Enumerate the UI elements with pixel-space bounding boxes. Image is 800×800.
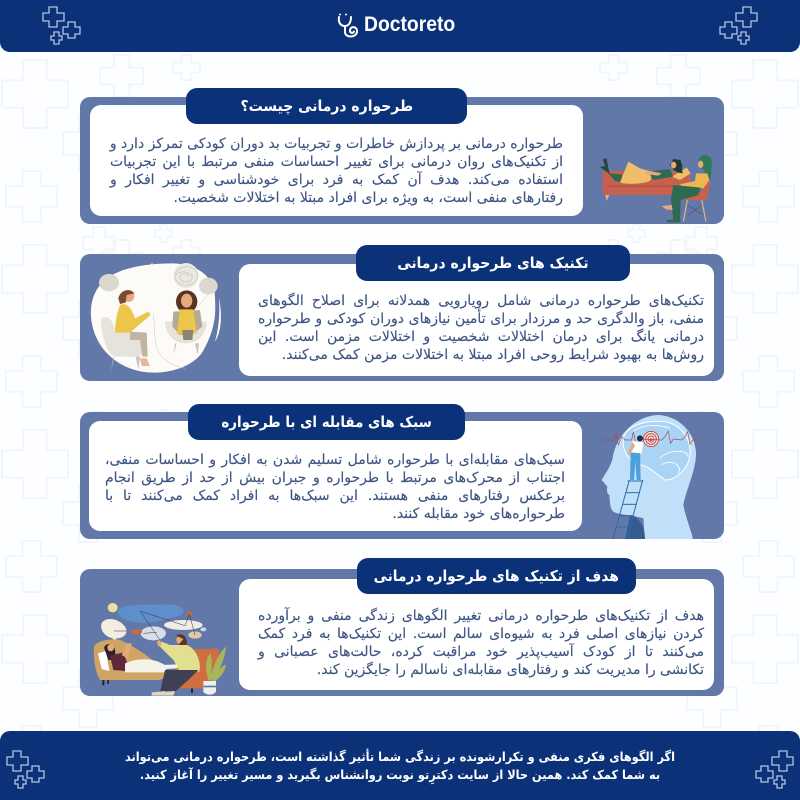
panel background <box>80 254 724 381</box>
icon: header crosses right <box>719 6 758 45</box>
section title: تکنیک های طرحواره درمانی <box>397 254 589 272</box>
section title <box>356 245 630 281</box>
body text: می‌کنند تا از کودک آسیب‌پذیر خود مراقبت کرده، حالت‌های عصبانی و <box>258 644 704 660</box>
body text <box>109 136 563 206</box>
body text: روش‌ها به بهبود شرایط روحی افراد مبتلا به اختلالات مزمن کمک می‌کنند. <box>282 347 704 363</box>
white text box <box>239 579 714 690</box>
panel background <box>80 569 724 696</box>
body text: برعکس رفتارهای منفی هستند. این سبک‌ها به افراد کمک می‌کنند تا با <box>105 488 565 504</box>
white text box <box>239 264 714 376</box>
panel: coping styles <box>80 404 724 539</box>
body text: اجتناب از محرک‌های مرتبط با طرحواره و جبران بیش از حد از طریق انجام <box>105 470 565 486</box>
header bar <box>0 0 800 52</box>
footer call to action: اگر الگوهای فکری منفی و تکرارشونده بر زندگی شما تأثیر گذاشته است، طرحواره درمانی می‌تواند <box>125 749 675 764</box>
body text <box>257 606 704 678</box>
illustration: patient on couch and therapist <box>94 603 226 696</box>
footer bar <box>0 731 800 800</box>
section title <box>186 88 467 124</box>
panel: schema therapy techniques <box>80 245 724 381</box>
body text: تکانشی را مدیریت کند و رفتارهای مقابله‌ای ناسالم را جایگزین کند. <box>317 662 704 678</box>
body text: منفی، باز والدگری حد و مرزدار برای تأمین نیازهای دوران کودکی و طرحواره <box>258 311 704 327</box>
logo wordmark: Doctoreto <box>364 13 455 36</box>
body text: سبک‌های مقابله‌ای با طرحواره شامل تسلیم شدن به افکار و احساسات منفی، <box>105 452 565 468</box>
body text <box>105 452 565 522</box>
body text: طرحواره‌های خود مقابله کنند. <box>392 506 565 522</box>
body text: رفتارهای منفی است، به ویژه برای افراد مبتلا به اختلالات شخصیت. <box>173 190 563 206</box>
body text: هدف از تکنیک‌های طرحواره درمانی تغییر الگوهای زندگی منفی و برآورده <box>258 608 704 624</box>
body text: از تکنیک‌های روان درمانی برای تغییر احساسات منفی مرتبط با این تجربیات <box>110 154 563 170</box>
body text <box>258 292 704 363</box>
panel background <box>80 97 724 224</box>
section title <box>188 404 465 440</box>
illustration: therapy on couch <box>600 155 712 222</box>
illustration: therapist and patient seated <box>90 262 221 373</box>
body text: درمانی یانگ برای درمان اختلالات شخصیت و اختلالات مزمن است. این <box>258 329 704 345</box>
panel: goal of techniques <box>80 558 724 696</box>
footer call to action: به شما کمک کند. همین حالا از سایت دکترِتو نوبت روانشناس بگیرید و مسیر تغییر را آغاز کنید. <box>140 767 660 782</box>
icon: footer crosses left <box>6 750 45 789</box>
body text: تکنیک‌های طرحواره درمانی شامل رویارویی همدلانه برای اصلاح الگوهای <box>258 293 704 309</box>
section title: طرحواره درمانی چیست؟ <box>240 97 413 115</box>
white text box <box>89 421 582 531</box>
icon: header crosses left <box>42 6 81 45</box>
section title <box>357 558 636 594</box>
illustration: head with brain and ladder <box>602 415 700 539</box>
body text: طرحواره درمانی بر پردازش خاطرات و تجربیات بد دوران کودکی تمرکز دارد و <box>110 136 563 152</box>
icon: stethoscope logo <box>338 14 358 38</box>
body text: استفاده می‌کند. هدف آن کمک به فرد برای خودشناسی و تغییر افکار و <box>110 172 563 188</box>
panel background <box>80 412 724 539</box>
icon: footer crosses right <box>755 750 794 789</box>
section title: سبک های مقابله ای با طرحواره <box>221 413 432 431</box>
section title: هدف از تکنیک های طرحواره درمانی <box>374 567 619 585</box>
panel: what is schema therapy <box>80 88 724 224</box>
body text: کردن نیازهای اصلی فرد به شیوه‌ای سالم است. این تکنیک‌ها به فرد کمک <box>258 626 704 642</box>
white text box <box>90 105 583 216</box>
footer call to action <box>125 748 675 784</box>
